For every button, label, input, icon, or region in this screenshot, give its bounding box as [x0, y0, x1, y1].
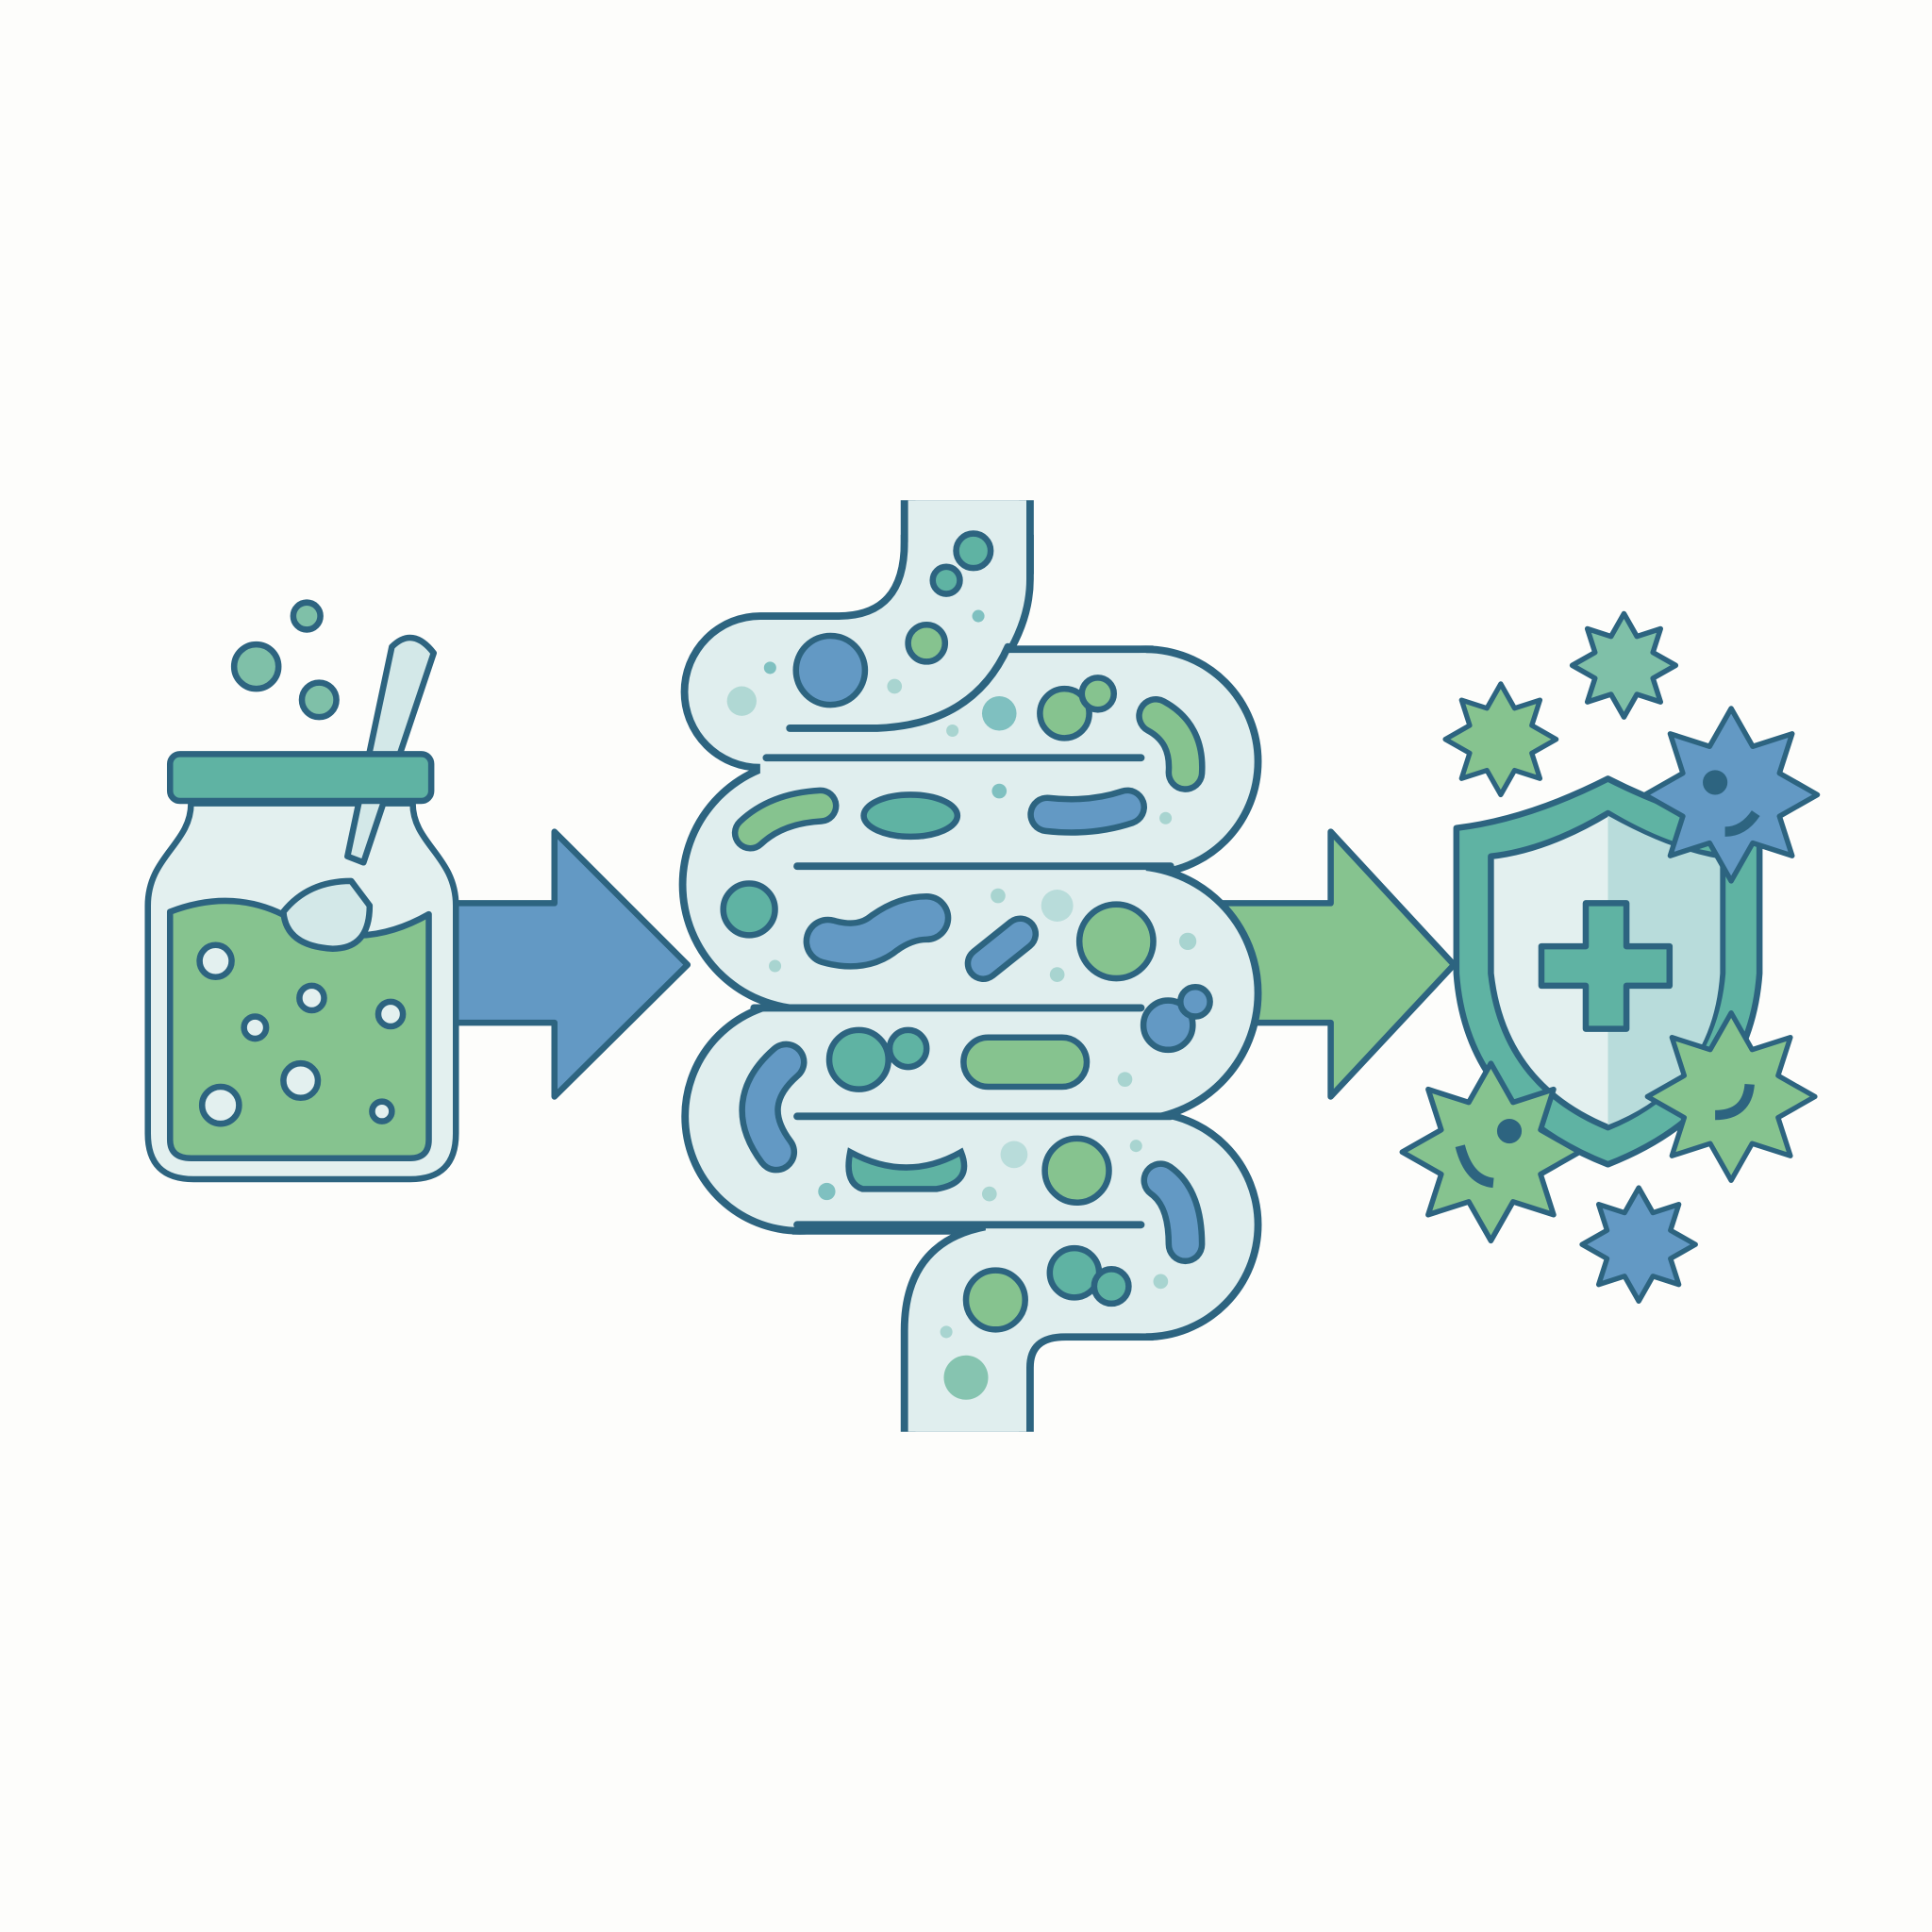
jar body: [148, 804, 456, 1179]
arrow: green: [1214, 832, 1454, 1096]
icon: shield: [1457, 778, 1759, 1164]
liquid bubbles: [200, 945, 403, 1124]
arrow: blue: [456, 832, 688, 1096]
spoon: [283, 638, 434, 949]
germs: [1402, 613, 1818, 1301]
bubbles above jar: [234, 603, 337, 717]
lid: [170, 754, 431, 801]
cross: [1541, 903, 1670, 1029]
bacteria: [724, 534, 1210, 1400]
icon: jar with probiotic drink: [148, 603, 456, 1179]
liquid: [170, 901, 429, 1158]
intestine: [687, 480, 1255, 1454]
